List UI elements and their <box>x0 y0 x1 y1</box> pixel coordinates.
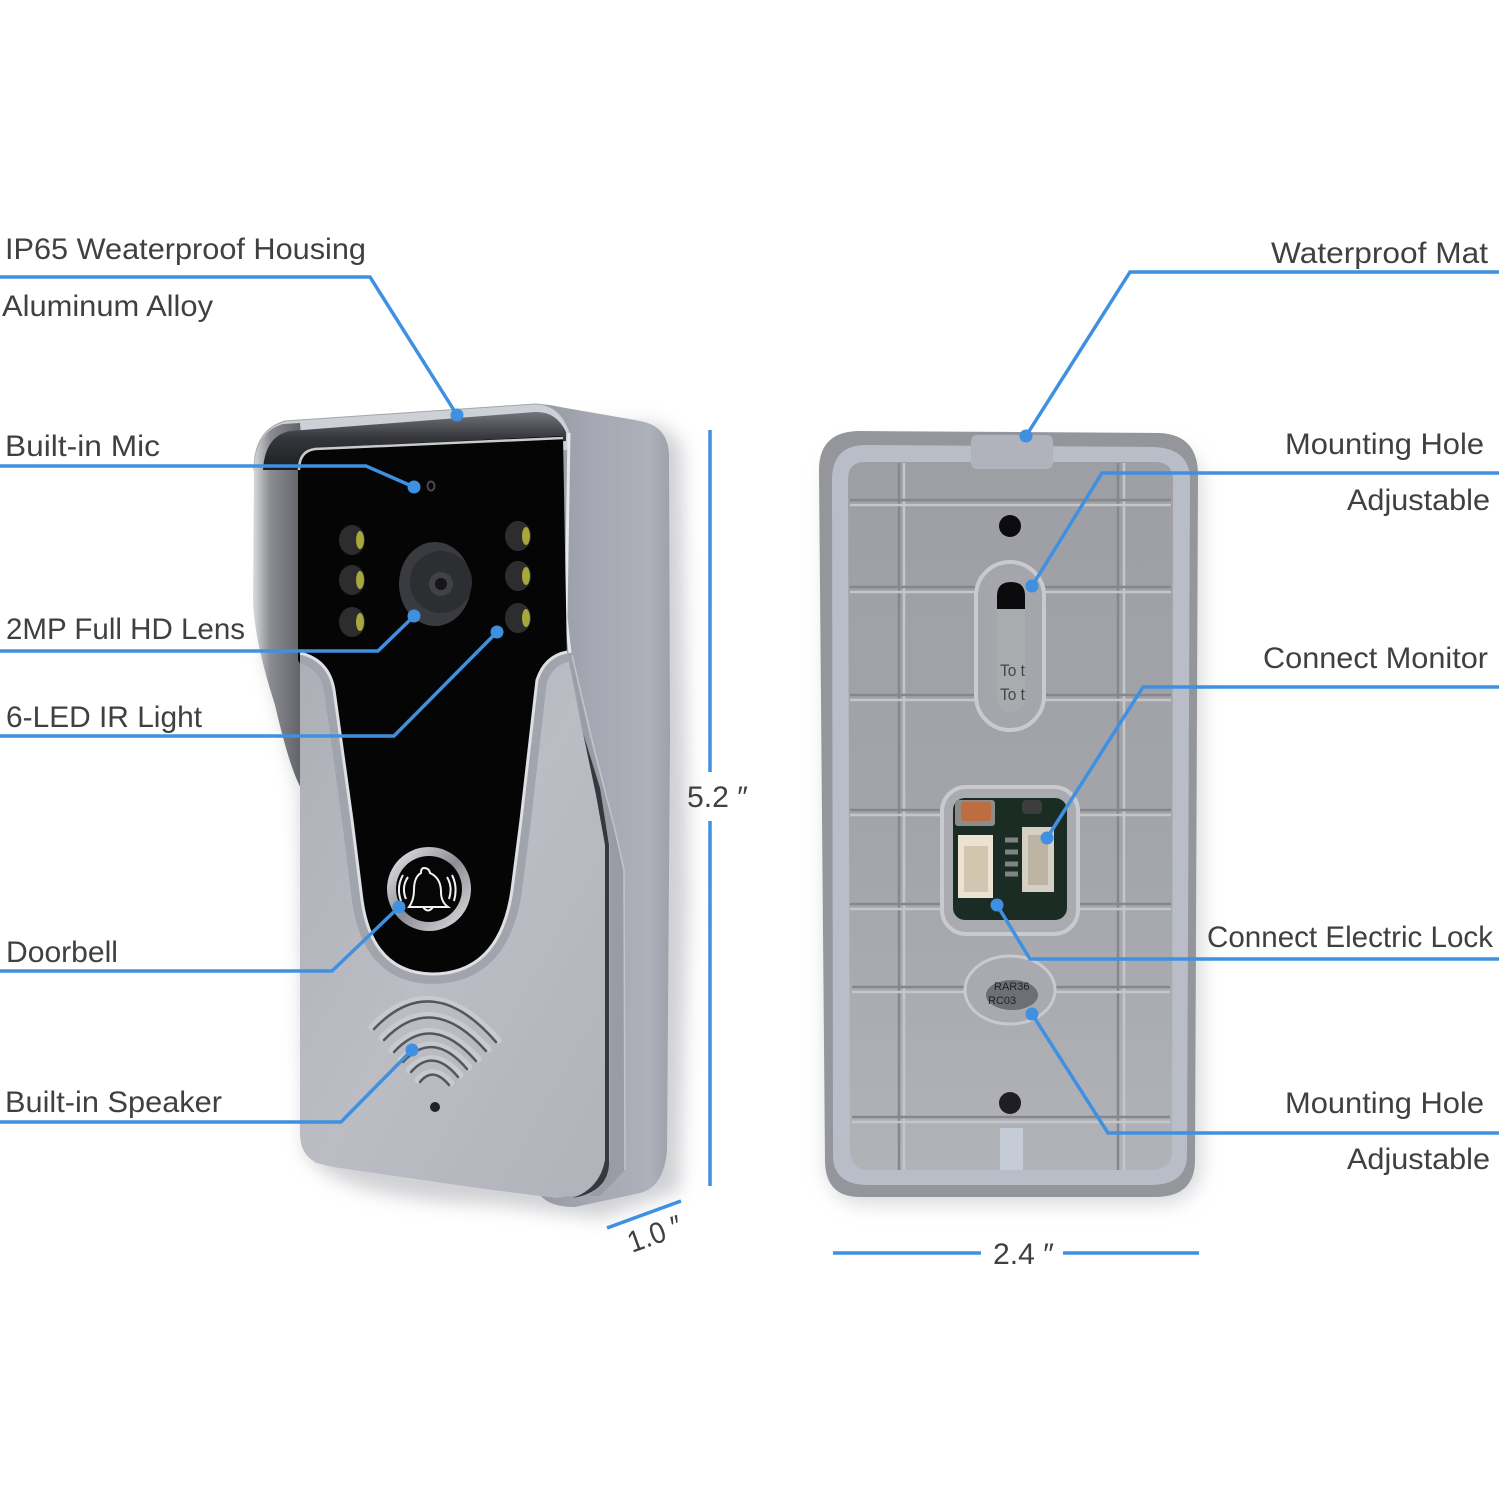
doorbell button <box>387 847 471 931</box>
speaker grille <box>372 999 498 1085</box>
label: waterproof mat: Waterproof Mat <box>1271 237 1489 270</box>
bell icon <box>399 868 456 910</box>
callout: speaker <box>0 1044 418 1122</box>
label: lower adjustable: Adjustable <box>1347 1143 1490 1176</box>
recess bevel band <box>300 652 567 974</box>
left connector <box>958 835 993 898</box>
callout: electric lock <box>990 898 1499 959</box>
label: IR light: 6-LED IR Light <box>6 701 203 734</box>
callout: lower mounting hole <box>1026 1008 1499 1176</box>
mic opening <box>428 482 434 490</box>
plate shadow <box>825 445 1203 1205</box>
callout: doorbell <box>0 900 406 971</box>
label: material: Aluminum Alloy <box>2 290 213 323</box>
height value: 5.2 ″ <box>687 781 748 814</box>
panel: front view of door station <box>253 404 688 1218</box>
circuit board window <box>942 787 1078 934</box>
bottom gasket tab <box>1000 1128 1023 1170</box>
hood right rim <box>566 433 570 653</box>
right connector <box>1022 827 1054 892</box>
label: mic: Built-in Mic <box>5 430 160 463</box>
callout: housing <box>0 233 464 422</box>
label: connect monitor: Connect Monitor <box>1263 642 1488 675</box>
trimmer component <box>955 800 995 826</box>
silver front plate <box>300 652 607 1198</box>
inner recessed floor <box>848 462 1173 1170</box>
camera lens <box>399 542 472 626</box>
callout: upper mounting hole <box>1026 428 1499 592</box>
hood interior roof <box>263 412 566 470</box>
shell ridge highlight <box>572 655 625 1170</box>
depth value: 1.0 ″ <box>623 1209 687 1260</box>
label: doorbell: Doorbell <box>6 936 118 969</box>
callout: connect monitor <box>1040 642 1499 844</box>
label: speaker: Built-in Speaker <box>5 1086 222 1119</box>
callout: IR light <box>0 626 504 736</box>
reinforcing ribs <box>850 463 1171 1170</box>
side shell <box>535 404 670 1207</box>
dimension: depth <box>607 1201 687 1260</box>
outer rim <box>819 431 1198 1197</box>
label: electric lock: Connect Electric Lock <box>1207 921 1494 954</box>
oval print line 2: RC03 <box>988 995 1016 1007</box>
right LED column <box>505 521 531 633</box>
right connector cavity <box>1028 835 1048 885</box>
speaker hole <box>430 1102 440 1112</box>
callouts: left side <box>0 233 504 1122</box>
plate right dark seam <box>573 733 609 1198</box>
label: housing: IP65 Weaterproof Housing <box>5 233 366 266</box>
label: lower mounting hole: Mounting Hole <box>1285 1087 1484 1120</box>
capacitor <box>1022 800 1042 814</box>
trimmer orange dial <box>961 802 991 821</box>
callout: mic <box>0 430 420 494</box>
panel top highlight <box>299 438 563 470</box>
upper screw hole <box>999 515 1021 537</box>
slot print: To t <box>1000 661 1025 680</box>
panel: rear view of mounting plate <box>819 431 1203 1205</box>
adjustable keyhole slot <box>976 562 1044 730</box>
top gasket tab <box>971 435 1053 469</box>
lower screw hole <box>999 1092 1021 1114</box>
callout: lens <box>0 610 420 651</box>
label: upper adjustable: Adjustable <box>1347 484 1490 517</box>
left LED column <box>339 525 365 637</box>
hood left wall <box>253 423 320 790</box>
oval label hole <box>965 956 1055 1024</box>
label: lens: 2MP Full HD Lens <box>6 613 245 646</box>
callout: waterproof mat <box>1020 237 1499 442</box>
left connector cavity <box>964 846 988 892</box>
oval print line 1: RAR36 <box>994 981 1029 993</box>
device drop shadow <box>262 425 688 1218</box>
width value: 2.4 ″ <box>993 1238 1054 1271</box>
solder pads <box>1005 840 1018 874</box>
light gasket <box>832 445 1190 1185</box>
label: upper mounting hole: Mounting Hole <box>1285 428 1484 461</box>
black front panel <box>298 436 567 975</box>
hood rim band <box>254 404 570 470</box>
callouts: right side <box>990 237 1499 1176</box>
slot print line 2: To t <box>1000 685 1025 704</box>
shell inner band <box>570 653 625 1196</box>
recess bright edge <box>300 652 567 974</box>
